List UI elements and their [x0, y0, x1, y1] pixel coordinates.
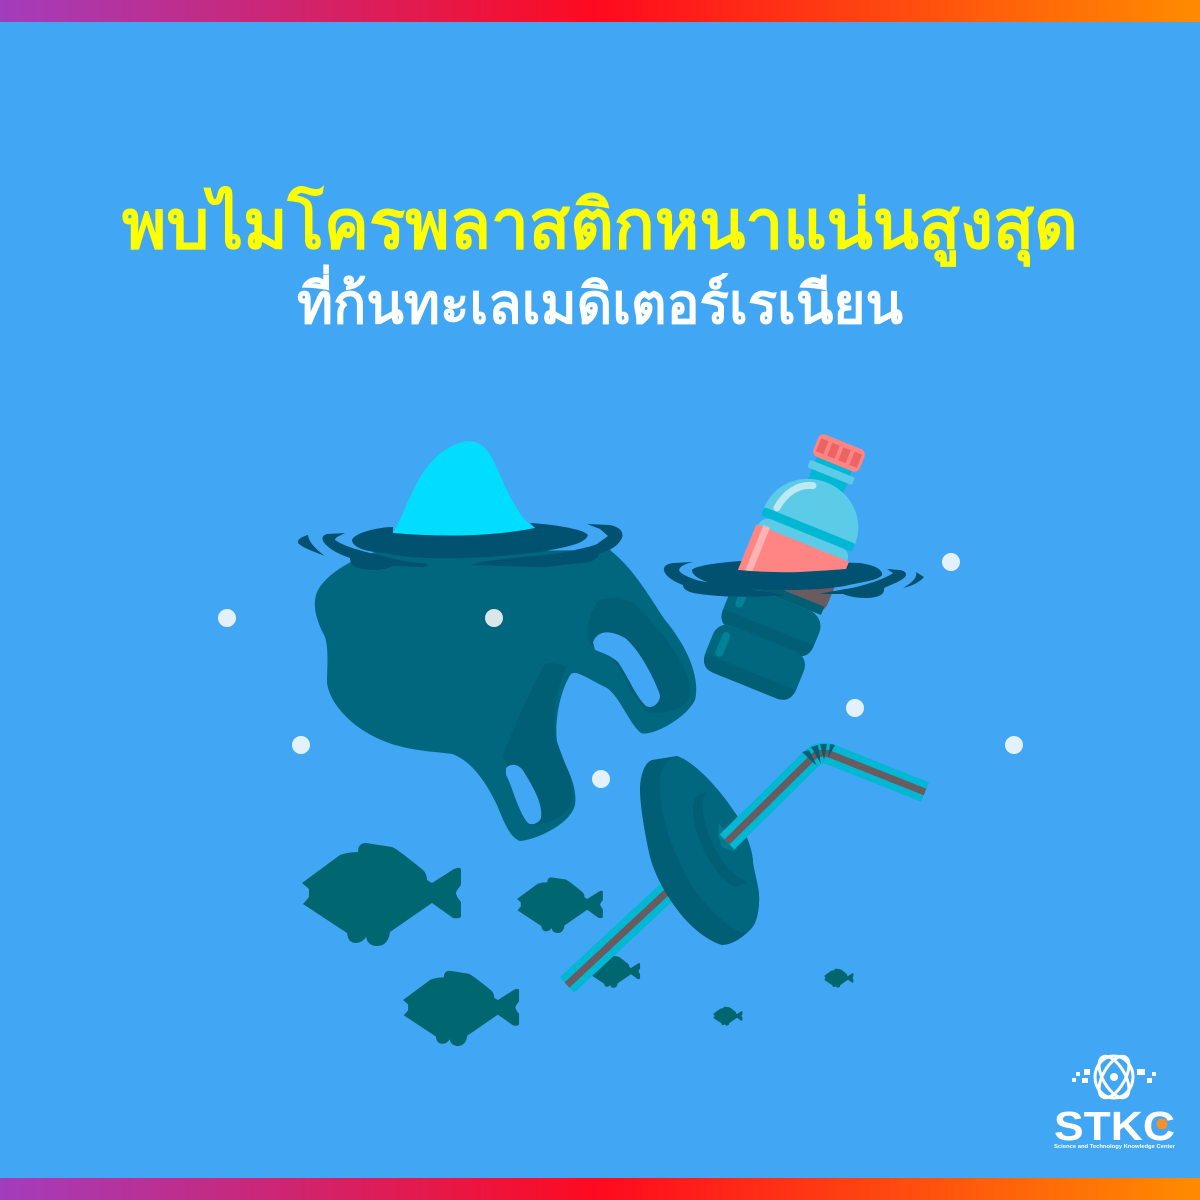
water ripples around bag	[298, 523, 622, 570]
bag handle fin above water	[393, 441, 535, 536]
title: พบไมโครพลาสติกหนาแน่นสูงสุด	[122, 185, 1078, 268]
fish lower	[403, 971, 519, 1046]
medium fish	[517, 877, 603, 933]
tiny fish centre	[713, 1007, 742, 1026]
straw upper segment	[727, 744, 925, 842]
straw bend ridges	[802, 744, 835, 766]
bottom gradient bar	[0, 1178, 1200, 1200]
STKC logo	[1054, 1052, 1176, 1150]
plastic bottle above water	[738, 434, 865, 572]
top gradient bar	[0, 0, 1200, 22]
water ripples around bottle	[664, 560, 924, 598]
logo wordmark: STKC	[1054, 1103, 1175, 1149]
plastic lid disc	[640, 756, 759, 945]
logo squares	[1072, 1069, 1156, 1083]
logo atom icon	[1093, 1052, 1135, 1102]
plastic bag	[315, 550, 696, 841]
subtitle: ที่ก้นทะเลเมดิเตอร์เรเนียน	[297, 264, 903, 335]
large fish	[302, 843, 461, 946]
logo orange dot	[1156, 1118, 1168, 1130]
plastic bottle underwater part	[700, 526, 848, 704]
straw lower segment	[567, 892, 667, 985]
microplastic bubbles	[218, 553, 1023, 788]
logo tagline: Science and Technology Knowledge Center	[1054, 1144, 1176, 1150]
straw lower tip over fish	[567, 945, 610, 985]
tiny fish right	[824, 969, 853, 988]
small fish behind straw	[590, 955, 640, 988]
